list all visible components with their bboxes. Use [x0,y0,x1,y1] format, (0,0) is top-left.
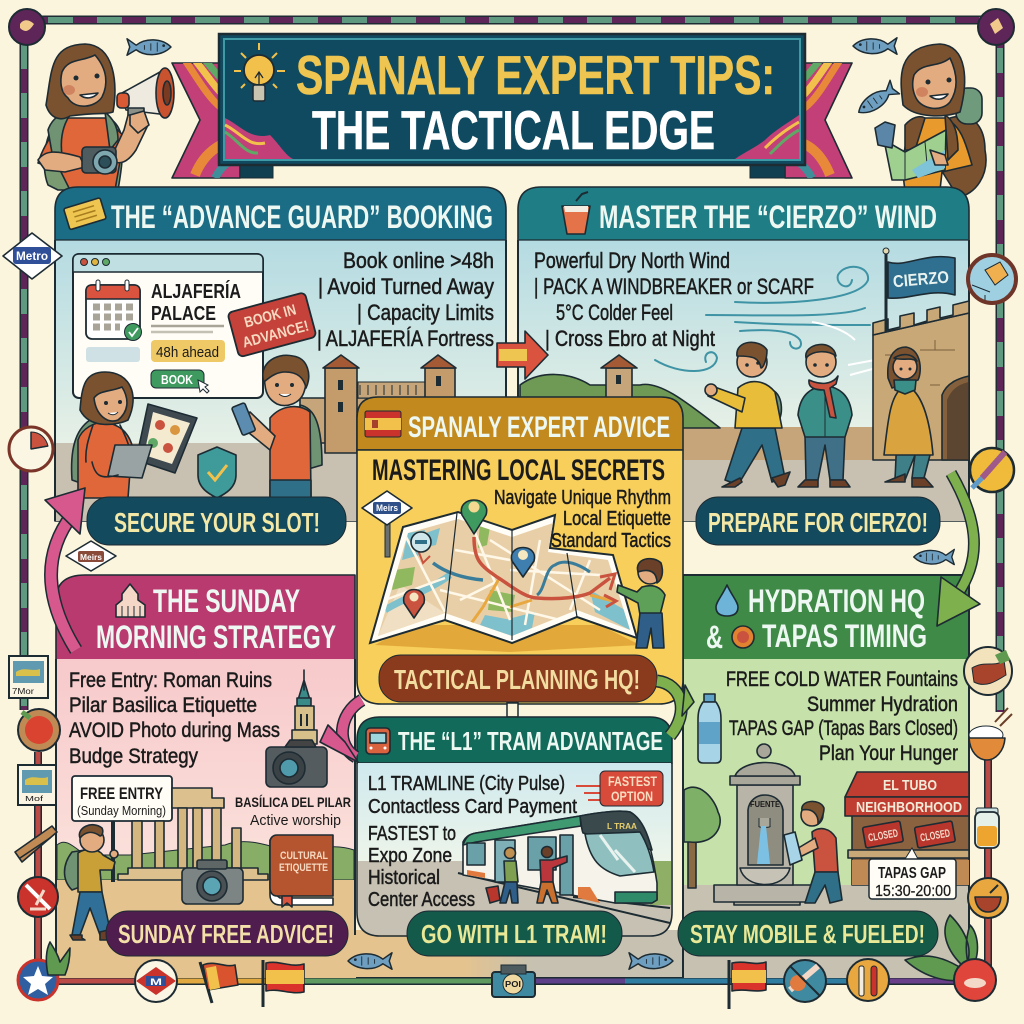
pill: secure your slot: SECURE YOUR SLOT! [114,507,320,538]
text block: hydration tips [726,668,958,765]
icon: fish bottom centre [629,953,673,969]
icon: flag three [729,960,766,1009]
icon: cursor [198,380,209,393]
icon: blue pin [511,548,535,577]
character: boy at fountain [784,801,842,903]
heading [706,583,927,655]
icon: broken compass badge [968,255,1016,303]
heading: THE “ADVANCE GUARD” BOOKING [111,199,493,235]
icon: folded map [875,122,948,180]
sign: metro [362,491,412,557]
text block: sunday tips: AVOID Photo during Mass [69,719,280,742]
heading: SPANALY EXPERT ADVICE [408,411,670,444]
icon: tram [366,728,390,754]
text block: wind tips: 5°C Colder Feel [556,300,673,325]
icon: tomato bowl [18,709,60,751]
icon: leaves right [905,915,978,981]
text block: tram tips: Center Access [368,889,475,911]
icon: photo camera on line: POI [505,980,521,989]
character: boy with sign [64,825,118,940]
icon: tapas plate [732,626,754,648]
flag: cierzo: CIERZO [892,268,950,291]
panel: advance guard booking [55,187,506,545]
pill: go with l1 tram: GO WITH L1 TRAM! [421,919,607,949]
icon: dslr camera [266,740,327,787]
icon: map card two: Mof [25,796,43,803]
text block: wind tips: | Cross Ebro at Night [545,326,715,351]
stamp: book in advance [227,292,317,357]
icon: small cathedral [116,584,145,617]
pill: stay mobile and fueled: STAY MOBILE & FUELED! [690,919,925,949]
text block: secrets list: Navigate Unique Rhythm [494,487,671,509]
icon: ticket [64,198,106,230]
character: boy pointing at map [617,559,665,648]
icon: fish bottom left [348,953,392,969]
illustration: tactical map [370,512,640,652]
icon: flag two [263,960,304,1007]
icon: corner badge left [9,9,45,45]
title ribbon right [750,60,852,178]
badge: fastest option: FASTEST [608,773,657,789]
panel: master the cierzo wind [518,187,969,545]
callout: free entry sign: (Sunday Morning) [77,803,166,818]
icon: small metro sign [66,541,116,571]
browser window: Aljaferia palace booking [73,254,263,398]
panel: hydration and tapas [678,575,970,978]
text block: booking tips: | Capacity Limits [357,300,494,325]
subheading: MASTERING LOCAL SECRETS [372,454,665,487]
icon: spanish flag [365,411,401,437]
text block: booking tips [317,248,494,351]
character: woman in tan coat [884,347,933,487]
icon: cultural etiquette book [270,835,333,907]
text block: basilica caption: BASÍLICA DEL PILAR [235,794,351,810]
text block: booking tips: Book online >48h [343,248,494,273]
icon: juice jar [975,808,999,848]
arrow: pink flow to sunday [320,700,362,762]
icon: corner badge right [978,9,1014,45]
icon: star badge [18,960,58,1000]
text block: booking tips: | Avoid Turned Away [318,274,494,299]
icon: fish top left [127,39,171,55]
icon: water drop [716,585,738,616]
icon: megaphone [117,68,174,133]
illustration: el tubo closed shop: NEIGHBORHOOD [856,799,962,816]
icon: metro badge: M [150,977,162,987]
text block: sunday tips: Pilar Basilica Etiquette [69,694,257,717]
icon: red plate badge [954,959,996,1001]
background tree [684,787,720,888]
icon: no entry pin [411,532,431,563]
character: girl with tablet [72,372,197,498]
heading: HYDRATION HQ [748,583,925,619]
heading: MORNING STRATEGY [96,619,336,655]
panel: sunday morning strategy [56,575,356,978]
hills [57,842,354,880]
icon: red pin [404,590,424,618]
character: man in teal jacket [798,344,852,487]
icon: leaves left [46,942,70,975]
pill: prepare for cierzo [696,497,940,545]
sign: metro: Meirs [376,503,398,513]
icon: cultural etiquette book: ETIQUETTE [279,862,328,874]
flag: cierzo [883,248,955,332]
heading: & [706,619,723,655]
pill: sunday free advice: SUNDAY FREE ADVICE! [118,919,334,949]
text block: secrets list [494,487,671,552]
icon: green pin [461,500,487,534]
background fortress [300,355,505,453]
icon: rice bowl [969,708,1012,760]
icon: map card one: 7Mor [12,687,34,696]
icon: metro sign left: Metro [16,249,48,263]
arrow: spain flag arrow [497,331,548,379]
illustration: el tubo closed shop [845,772,969,885]
text block: wind tips: Powerful Dry North Wind [534,248,730,273]
ground strip along the bottom [340,930,690,977]
title banner [219,34,805,165]
pill: secure your slot [87,497,346,545]
pill: stay mobile and fueled [678,911,938,956]
text block: sunday tips: Free Entry: Roman Ruins [69,669,272,692]
icon: flag one [200,962,238,1003]
icon: cold drink [562,192,590,234]
pill: tactical planning hq [379,655,657,702]
connector between centre panels [507,703,518,717]
pill: prepare for cierzo: PREPARE FOR CIERZO! [708,507,928,538]
pill: go with l1 tram [407,911,622,956]
castle wall and gate [873,301,969,460]
text block: hydration tips: Plan Your Hunger [819,742,958,765]
text block: wind tips: | PACK A WINDBREAKER or SCARF [534,274,814,299]
heading [96,583,336,655]
heading: TAPAS TIMING [762,618,927,654]
icon: cultural etiquette book: CULTURAL [280,850,328,862]
illustration: fuente fountain [714,744,814,905]
text block: wind tips [534,248,814,351]
text block: secrets list: Standard Tactics [551,530,671,552]
text block: tram tips: Expo Zone [368,845,452,867]
background tower and hills [520,355,720,428]
icon: camera [82,147,117,174]
heading: THE SUNDAY [153,583,300,619]
icon: map card two [18,765,56,805]
button: book [151,370,204,388]
illustration: basilica tower [292,670,317,744]
pill: sunday free advice [106,911,348,956]
character: boy with phone [232,355,322,498]
illustration: roman ruins [118,788,268,880]
callout: free entry sign: FREE ENTRY [80,784,164,803]
badge: fastest option [576,771,663,806]
title line 1: SPANALY EXPERT TIPS: [296,44,775,106]
text block: booking tips: | ALJAFERÍA Fortress [317,326,494,351]
icon: fish leaping [854,80,900,119]
arrow: pink flow to booking [45,488,85,650]
text block: basilica caption [235,794,351,829]
button: book: BOOK [161,372,194,387]
title line 2: THE TACTICAL EDGE [312,99,715,161]
icon: cutlery badge [847,959,889,1001]
callout: tapas gap times [869,848,956,900]
illustration: tram [458,811,670,923]
icon: metro sign left [3,233,62,279]
panel: L1 tram advantage [357,717,672,956]
text block: sunday tips: Budge Strategy [69,745,198,768]
icon: photo camera on line [492,965,535,997]
icon: food bowl badge [968,878,1008,918]
title ribbon left [172,60,273,178]
arrow: green flow to hydration [937,473,980,626]
sign: closed left: CLOSED [867,827,899,844]
text block: tram tips: Contactless Card Payment [368,796,577,818]
icon: camera [182,860,243,904]
illustration: el tubo closed shop: EL TUBO [883,777,937,794]
illustration: fuente fountain: FUENTE [750,800,781,809]
icon: metro badge [135,960,177,1002]
text block: tram tips [368,773,577,911]
icon: water bottle [698,694,721,763]
icon: fish top right [853,38,897,54]
icon: paint brush badge [970,448,1014,492]
icon: tablets [108,404,197,478]
callout: tapas gap times: TAPAS GAP [878,865,946,882]
icon: no sign [18,877,58,917]
stamp: book in advance: ADVANCE! [241,318,311,352]
callout: tapas gap times: 15:30-20:00 [875,883,951,900]
text block: tram tips: L1 TRAMLINE (City Pulse) [368,773,565,795]
callout: free entry sign [72,776,172,882]
arrow: map red routes [600,574,616,607]
character: man in yellow jacket [705,342,790,487]
icon: small metro sign: Meirs [80,553,103,562]
heading: THE “L1” TRAM ADVANTAGE [398,726,663,756]
characters: tram passengers [486,846,567,903]
text block: sunday tips [69,669,280,768]
icon: map card one [9,656,48,698]
icon: clothes peg [15,826,57,862]
illustration: tram: L TRAA [607,822,637,831]
arrow: green flow to tram [657,681,694,736]
text block: tram tips: FASTEST to [368,823,456,845]
text block: secrets list: Local Etiquette [563,508,671,530]
icon: shield check [198,447,236,498]
browser window: Aljaferia palace booking: ALJAFERÍA [151,280,241,303]
character: girl with map [875,44,986,197]
text block: hydration tips: FREE COLD WATER Fountains [726,668,958,691]
badge: 48h ahead: 48h ahead [156,344,219,361]
icon: clock [9,427,53,471]
character: girl with megaphone [38,44,174,190]
text block: hydration tips: Summer Hydration [807,693,958,716]
text block: basilica caption: Active worship [250,812,341,829]
icon: paint palette badge [784,960,826,1002]
wind swirls [655,267,880,375]
icon: tapas meat badge [964,647,1012,695]
stamp: book in advance: BOOK IN [242,301,298,331]
sign: closed right: CLOSED [919,827,951,844]
panel: spanaly expert advice [357,397,683,704]
icon: calendar [86,280,142,340]
badge: fastest option: OPTION [611,788,653,804]
pill: tactical planning hq: TACTICAL PLANNING HQ! [394,664,640,695]
icon: fish right mid [914,549,954,565]
icon: light bulb [234,43,285,101]
browser window: Aljaferia palace booking: PALACE [151,303,216,325]
text block: tram tips: Historical [368,867,440,889]
